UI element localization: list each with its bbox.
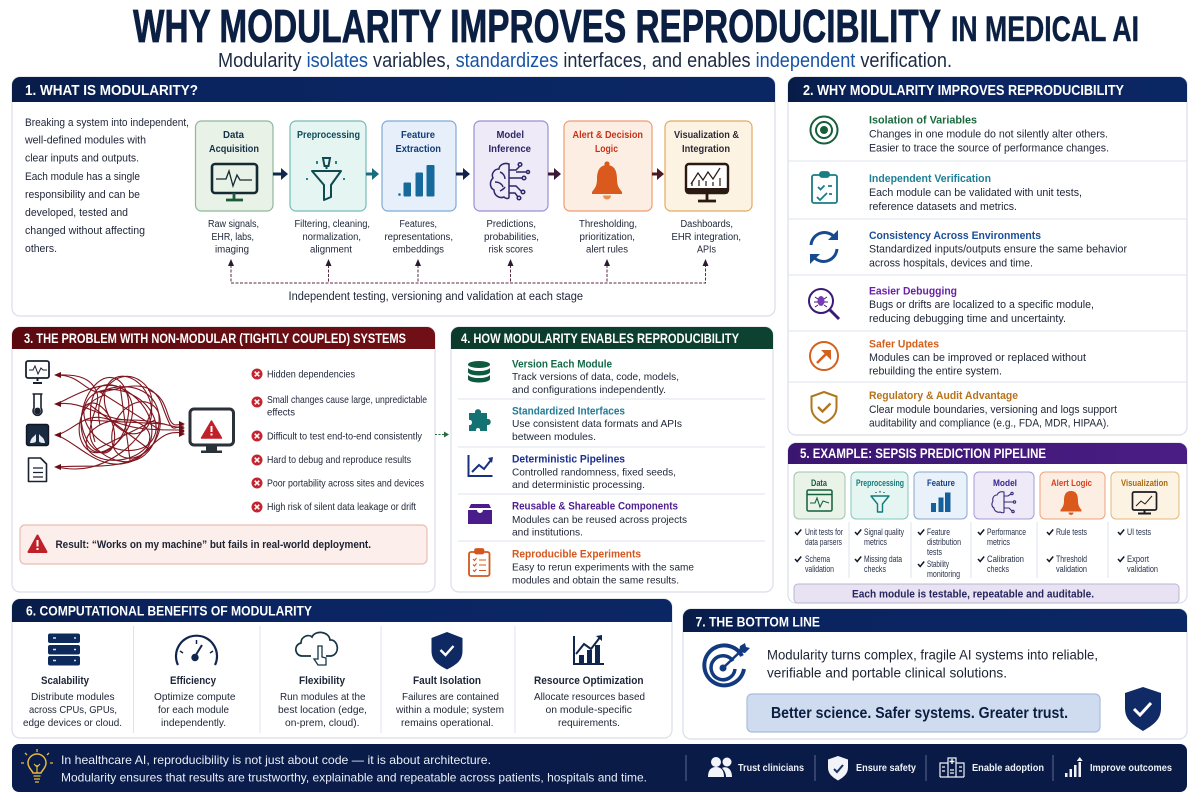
benefit: efficiency: Optimize compute [154,691,236,703]
item: isolation of variables: Changes in one module do not silently alter others. [869,128,1108,140]
icon: dashboard monitor [686,164,728,201]
checklists: Rule tests [1056,527,1087,537]
benefit: resource optimization: on module-specific [546,704,632,716]
badge: enable adoption: Enable adoption [972,763,1044,774]
icon: lightbulb [21,749,53,782]
module: alert and decision logic: Logic [595,143,618,155]
text block: architecture message [61,753,647,784]
icon: trend line [468,455,492,476]
icon: small brain [992,492,1016,513]
arrow [366,168,379,180]
item: version each module: Track versions of data, code, models, [512,371,679,383]
stage: model: Model [993,478,1017,489]
icon: small bars [931,492,950,512]
item: reproducible experiments [469,548,694,586]
caption: independent testing: Independent testing, versioning and validation at each stage [288,291,583,303]
panel: 4 how modularity enables reproducibility [451,327,773,592]
checklists: UI tests [1127,527,1151,537]
benefit: fault isolation: Failures are contained [402,691,499,703]
arrow: panel 3 to panel 4 [435,432,449,438]
module: data acquisition: Data [223,129,244,141]
icon: storage box [468,504,492,524]
checklists: Feature [927,527,950,537]
heading: what is modularity: 1. WHAT IS MODULARITY? [25,82,198,99]
module descriptions: representations, [384,232,453,243]
module descriptions: Raw signals, [208,219,259,230]
module: preprocessing: Preprocessing [297,129,360,141]
item: version each module: and configurations independently. [512,384,666,396]
checklists: validation [1056,564,1087,574]
module descriptions: EHR, labs, [212,232,254,243]
module: model inference: Inference [488,143,531,155]
callout: testable statement [794,584,1179,603]
text block: definition: Each module has a single [25,171,140,183]
list: problems [252,368,427,513]
benefit: scalability: Scalability [41,675,90,687]
benefit: flexibility: best location (edge, [278,704,367,716]
arrow [548,168,561,180]
benefit: resource optimization: Allocate resources based [534,691,645,703]
item: isolation of variables: Isolation of Variables [869,114,977,126]
item: reusable and shareable components: Modules can be reused across projects [512,514,687,526]
list: problems: effects [267,406,295,418]
checklists: metrics [864,537,887,547]
module: alert and decision logic: Alert & Decision [572,129,643,141]
benefit: scalability: Distribute modules [31,691,114,703]
checklists: monitoring [927,569,960,579]
icon: flask [32,394,42,415]
text block: definition: Breaking a system into independent, [25,117,189,129]
text block: definition: clear inputs and outputs. [25,152,139,164]
icon: cloud with hand [296,632,337,665]
item: safer updates: Safer Updates [869,338,939,350]
list: problems: Difficult to test end-to-end consistently [267,430,423,442]
title: IN MEDICAL AI [951,10,1139,49]
item: independent verification: reference datasets and metrics. [869,201,1017,213]
icon: magnifier with bug [809,289,839,319]
checklists: checks [987,564,1009,574]
icon: shield check [1125,687,1161,731]
module descriptions: prioritization, [580,232,635,243]
stage: feature: Feature [927,478,955,489]
module descriptions: alignment [310,244,352,256]
badge: improve outcomes: Improve outcomes [1090,763,1172,774]
module descriptions: Thresholding, [579,219,637,230]
benefit: fault isolation [395,632,504,729]
item: regulatory and audit advantage: auditability and compliance (e.g., FDA, MDR, HIPAA). [869,418,1109,430]
item: safer updates [810,338,1086,378]
text block: architecture message: In healthcare AI, reproducibility is not just about code — it is about architecture. [61,753,491,767]
checklists: tests [927,547,942,557]
icon: checklist clipboard [469,549,490,576]
text block: definition: well-defined modules with [24,134,146,146]
badge: trust clinicians [708,757,804,777]
module descriptions: Dashboards, [680,219,733,230]
module: feature extraction [382,121,456,211]
item: deterministic pipelines [468,454,676,491]
icon: data monitor [807,490,832,511]
badge: ensure safety [828,756,916,780]
stage: feature [914,472,967,519]
icon: funnel [306,158,345,200]
item: reproducible experiments: Easy to rerun experiments with the same [512,562,694,574]
heading: how modularity enables: 4. HOW MODULARITY ENABLES REPRODUCIBILITY [461,330,740,346]
heading: bottom line: 7. THE BOTTOM LINE [696,614,820,630]
item: isolation of variables [810,114,1109,154]
module: visualization and integration: Integration [682,143,730,155]
panel: 5 sepsis prediction pipeline [788,443,1187,603]
icon: target with arrow [704,643,750,685]
item: independent verification: Each module can be validated with unit tests, [869,187,1082,199]
module descriptions: APIs [697,244,716,256]
icon: small dashboard [1132,492,1156,514]
benefit: resource optimization: requirements. [558,717,620,729]
checklists: checks [864,564,886,574]
subtitle: Modularity isolates variables, standardizes interfaces, and enables independent verification. [218,50,952,72]
checklists: data parsers [805,537,842,547]
item: regulatory and audit advantage [812,390,1117,430]
checklists: Export [1127,554,1149,564]
checklists: Signal quality [864,527,904,537]
panel: 2 why modularity improves reproducibility [788,77,1187,435]
module: visualization and integration [665,121,752,211]
item: reusable and shareable components: and institutions. [512,526,583,538]
icon: clipboard check [812,172,837,203]
item: standardized interfaces: Standardized Interfaces [512,406,625,418]
icon: gauge [176,636,217,665]
module: visualization and integration: Visualization & [674,129,739,141]
stage: data: Data [811,478,828,489]
item: deterministic pipelines: Deterministic Pipelines [512,454,625,466]
icon: input monitor [26,361,49,383]
benefit: scalability: across CPUs, GPUs, [29,704,117,716]
module: model inference: Model [496,129,524,141]
benefit: scalability: edge devices or cloud. [23,717,122,729]
icon: bar chart [398,165,434,196]
item: easier debugging: Easier Debugging [869,286,957,298]
callout: testable statement: Each module is testable, repeatable and auditable. [852,588,1094,600]
arrow [456,168,470,180]
benefit: fault isolation: Fault Isolation [413,675,481,687]
icon: shield check [812,392,836,423]
item: easier debugging: Bugs or drifts are localized to a specific module, [869,299,1094,311]
module: data acquisition: Acquisition [209,143,259,155]
item: standardized interfaces: between modules. [512,431,596,443]
checklists: Threshold [1056,554,1087,564]
arrow [273,168,288,180]
heading: problem with non-modular: 3. THE PROBLEM WITH NON-MODULAR (TIGHTLY COUPLED) SYSTEMS [24,330,406,346]
icon: lungs x-ray [26,424,48,446]
item: safer updates: rebuilding the entire system. [869,366,1002,378]
checklists: metrics [987,537,1010,547]
benefit: flexibility: Run modules at the [280,691,366,703]
text block: bottom line statement: Modularity turns complex, fragile AI systems into reliable, [767,646,1098,662]
badge: trust clinicians: Trust clinicians [738,763,804,774]
checklists: Schema [805,554,830,564]
module descriptions: normalization, [302,232,361,243]
list: problems: High risk of silent data leakage or drift [267,501,416,513]
module descriptions: EHR integration, [672,232,741,243]
item: standardized interfaces: Use consistent data formats and APIs [512,418,682,430]
module descriptions: Filtering, cleaning, [294,219,370,230]
list: problems: Hard to debug and reproduce results [267,454,411,466]
text block: architecture message: Modularity ensures that results are trustworthy, explainable and repeatable across patients, hospitals and time. [61,770,647,784]
item: safer updates: Modules can be improved or replaced without [869,352,1086,364]
benefit: efficiency: for each module [158,704,229,716]
chart: tangled dependency web [54,369,185,470]
list: problems: Poor portability across sites and devices [267,478,424,490]
icon: monitor with ecg [212,164,257,200]
checklists: validation [1127,564,1158,574]
arrow [652,168,664,180]
benefit: resource optimization [534,635,645,729]
item: regulatory and audit advantage: Clear module boundaries, versioning and logs support [869,404,1117,416]
icon: failing monitor [190,409,234,453]
item: consistency across environments [810,230,1127,270]
text block: definition: responsibility and can be [25,189,140,201]
benefit: fault isolation: remains operational. [401,717,494,729]
item: isolation of variables: Easier to trace the source of performance changes. [869,142,1109,154]
stage: preprocessing: Preprocessing [856,478,904,489]
benefit: resource optimization: Resource Optimization [534,675,644,687]
benefit: efficiency [154,636,236,729]
module: preprocessing [290,121,366,211]
panel: 6 computational benefits [12,599,672,738]
icon: small funnel [871,491,889,512]
text block: definition: developed, tested and [25,207,128,219]
text block: bottom line statement: verifiable and portable clinical solutions. [767,664,1007,680]
item: independent verification: Independent Verification [869,173,991,185]
item: deterministic pipelines: and deterministic processing. [512,479,645,491]
item: reproducible experiments: Reproducible Experiments [512,548,641,560]
icon: shield check [432,632,462,670]
module: model inference [474,121,548,211]
item: regulatory and audit advantage: Regulatory & Audit Advantage [869,390,1018,402]
checklists: Unit tests for [805,527,843,537]
benefit: flexibility: Flexibility [299,675,346,687]
item: standardized interfaces [469,406,682,443]
heading: sepsis example: 5. EXAMPLE: SEPSIS PREDICTION PIPELINE [800,446,1046,461]
icon: bell [592,161,622,200]
module: alert and decision logic [564,121,652,211]
icon: small bell [1060,491,1082,515]
icon: database [468,361,490,382]
checklists: Stability [927,559,949,569]
panel: 7 the bottom line [683,609,1187,739]
text block: definition [24,117,189,255]
icon: target [810,116,838,144]
module: feature extraction: Extraction [396,143,441,155]
badge: enable adoption [940,758,1044,777]
module descriptions: risk scores [488,244,533,256]
badge: improve outcomes [1065,757,1172,777]
icon: circled arrow [810,342,838,370]
benefit: scalability [23,634,122,729]
icon: growth chart [573,636,604,665]
module: data acquisition [196,121,273,211]
item: reusable and shareable components [468,500,687,538]
stage: alert logic [1040,472,1105,519]
list: problems: Hidden dependencies [267,368,355,380]
module descriptions: probabilities, [484,232,539,243]
item: version each module [468,358,679,396]
badge: ensure safety: Ensure safety [856,763,916,774]
stage: data [794,472,845,519]
icon: brain with circuit [490,163,530,200]
module descriptions: imaging [215,244,249,256]
item: consistency across environments: across hospitals, devices and time. [869,258,1033,270]
heading: why modularity: 2. WHY MODULARITY IMPROVES REPRODUCIBILITY [803,82,1124,99]
module descriptions [208,219,741,256]
item: easier debugging: reducing debugging time and uncertainty. [869,313,1066,325]
benefit: efficiency: independently. [161,717,226,729]
stage: visualization [1111,472,1179,519]
item: version each module: Version Each Module [512,358,612,370]
module descriptions: Predictions, [486,219,536,230]
callout: better science [747,694,1100,732]
benefit: flexibility [278,632,367,729]
icon: puzzle piece [469,409,491,431]
item: independent verification [812,172,1082,213]
stage: preprocessing [851,472,908,519]
list: problems: Small changes cause large, unpredictable [267,394,427,406]
benefit: efficiency: Efficiency [170,675,217,687]
item: consistency across environments: Standardized inputs/outputs ensure the same behavior [869,244,1127,256]
module descriptions: Features, [400,219,437,230]
icon: server stack [48,634,80,666]
module descriptions: alert rules [586,244,628,256]
panel: 1 what is modularity [12,77,775,316]
stage: model [974,472,1034,519]
icon: sync arrows [810,230,838,264]
checklists: validation [805,564,834,574]
item: easier debugging [809,286,1094,325]
heading: computational benefits: 6. COMPUTATIONAL BENEFITS OF MODULARITY [26,602,313,618]
text block: definition: changed without affecting [25,225,145,237]
checklists: Missing data [864,554,902,564]
checklists: Performance [987,527,1026,537]
text block: definition: others. [25,243,57,255]
module: feature extraction: Feature [401,129,435,141]
item: reproducible experiments: modules and obtain the same results. [512,574,679,586]
checklists: Calibration [987,554,1024,564]
stage: visualization: Visualization [1121,478,1168,489]
arrow: dashed testing bracket [228,259,708,283]
stage: alert logic: Alert Logic [1051,478,1092,489]
item: consistency across environments: Consistency Across Environments [869,230,1041,242]
callout: result: Result: “Works on my machine” but fails in real-world deployment. [56,539,371,551]
checklists: distribution [927,537,961,547]
benefit: flexibility: on-prem, cloud). [285,717,360,729]
callout: result [20,525,427,564]
icon: document [28,458,46,482]
footer banner [12,744,1187,792]
text block: bottom line statement [767,646,1098,680]
panel: 3 problem with non-modular systems [12,327,435,592]
callout: better science: Better science. Safer systems. Greater trust. [771,705,1068,722]
item: deterministic pipelines: Controlled randomness, fixed seeds, [512,466,676,478]
item: reusable and shareable components: Reusable & Shareable Components [512,500,678,512]
module descriptions: embeddings [392,244,444,256]
benefit: fault isolation: within a module; system [395,704,504,716]
checklists [795,522,1158,579]
